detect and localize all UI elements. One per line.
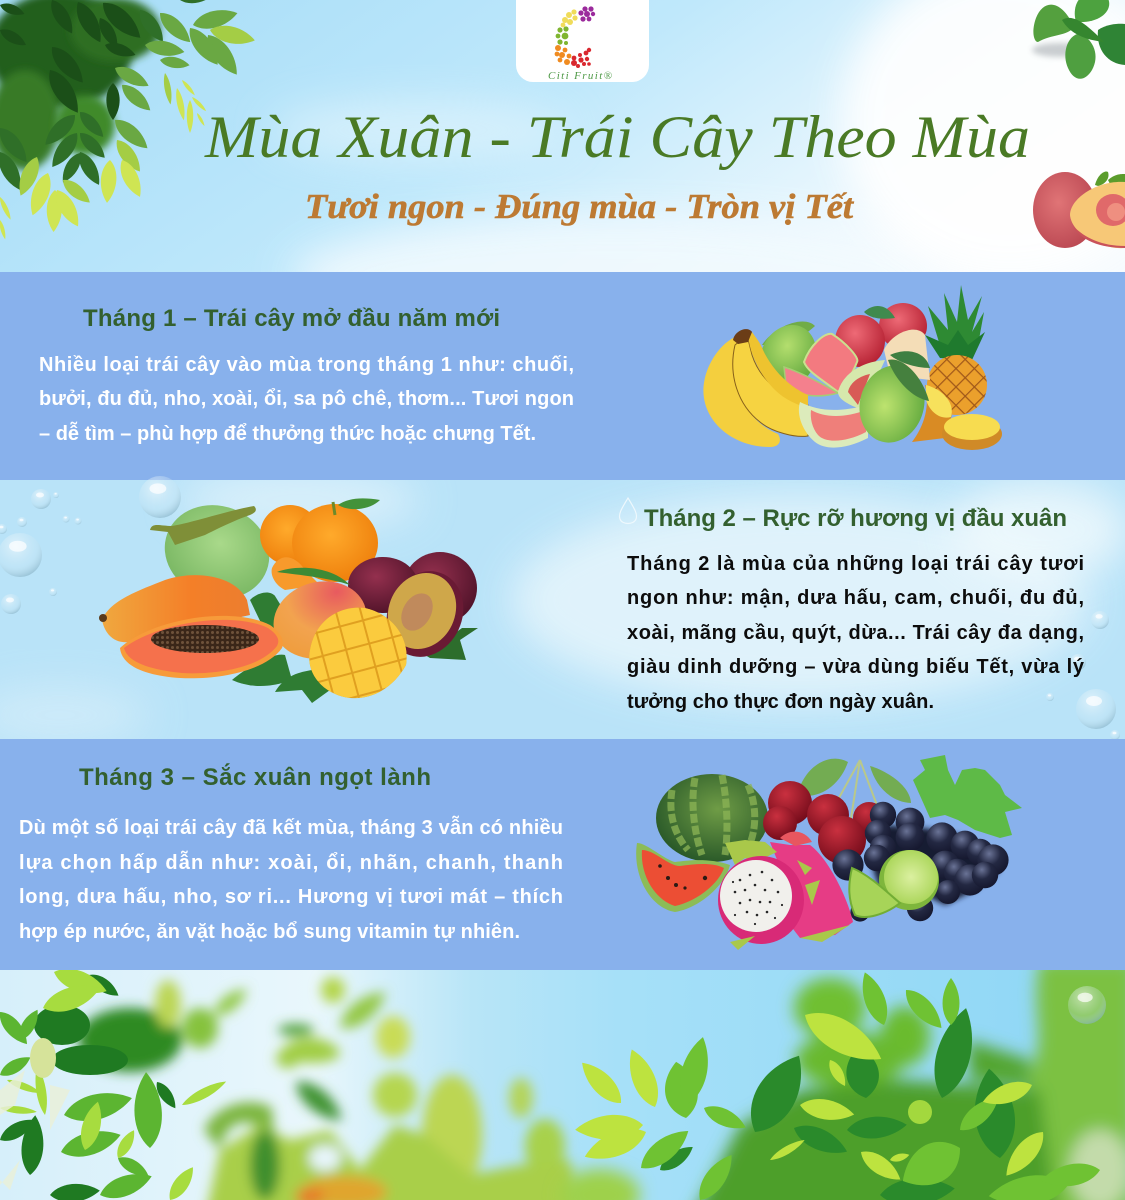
- heading: month 1: Tháng 1 – Trái cây mở đầu năm mới: [83, 305, 500, 332]
- text block: month 1: – dễ tìm – phù hợp để thưởng thức hoặc chưng Tết.: [39, 421, 536, 445]
- subtitle: Tươi ngon - Đúng mùa - Tròn vị Tết: [305, 187, 854, 226]
- apples: [835, 303, 930, 380]
- icon: peach: [1033, 172, 1125, 248]
- text block: month 3: lựa chọn hấp dẫn như: xoài, ổi, nhãn, chanh, thanh: [19, 850, 563, 874]
- water bubble on foliage: [1068, 986, 1106, 1024]
- text block: month 1: bưởi, đu đủ, nho, xoài, ổi, sa pô chê, thơm... Tươi ngon: [39, 388, 574, 410]
- illustration: month 3 fruit: [636, 755, 1022, 950]
- bottom foliage scene: [0, 960, 1125, 1200]
- pineapple: [912, 285, 1002, 450]
- text block: month 2: ngon như: mận, dưa hấu, cam, chuối, đu đủ,: [627, 587, 1084, 609]
- plums: [348, 552, 478, 670]
- guava: [750, 316, 857, 398]
- text block: month 3: long, dưa hấu, nho, sơ ri... Hương vị tươi mát – thích: [19, 886, 563, 908]
- text block: month 2: tưởng cho thực đơn ngày xuân.: [627, 691, 934, 713]
- heading: month 3: Tháng 3 – Sắc xuân ngọt lành: [79, 763, 431, 791]
- icon: faint drop beside month 2 heading: [619, 498, 637, 524]
- illustration: month 1 fruit: [703, 285, 1002, 450]
- blurred background leaves: right: [560, 960, 1125, 1200]
- foreground leaves right: [656, 1004, 1020, 1200]
- heading: month 2: Tháng 2 – Rực rỡ hương vị đầu xuân: [644, 505, 1067, 532]
- cherries: [763, 759, 911, 864]
- text block: month 2: xoài, mãng cầu, quýt, dừa... Trái cây đa dạng,: [627, 622, 1084, 644]
- foreground leaves left: [0, 970, 180, 1200]
- limes: [849, 850, 939, 917]
- section background: month 2 sky: [0, 470, 1125, 745]
- icon: basil leaves: [1032, 0, 1125, 79]
- top-left foliage: [0, 0, 257, 240]
- header background sky: [0, 0, 1125, 272]
- panel: month 1: [0, 272, 1125, 480]
- dragon fruit: [718, 832, 853, 950]
- coconut: [150, 491, 283, 613]
- mango: [265, 568, 375, 669]
- panel: month 3: [0, 739, 1125, 970]
- pomelo: [799, 351, 933, 450]
- papaya whole: [99, 575, 250, 642]
- water bubbles: [0, 476, 1120, 740]
- green leaves: [232, 593, 330, 703]
- text block: month 1: [39, 354, 574, 445]
- text block: month 2: Tháng 2 là mùa của những loại trái cây tươi: [627, 553, 1084, 575]
- oranges: [260, 498, 380, 590]
- blurred background leaves: centre: [78, 977, 590, 1200]
- illustration: month 2 fruit: [99, 498, 478, 703]
- bananas: [703, 329, 808, 447]
- watermelon: [636, 774, 768, 912]
- text block: month 2: giàu dinh dưỡng – vừa dùng biếu Tết, vừa lý: [627, 656, 1085, 678]
- text block: month 1: Nhiều loại trái cây vào mùa trong tháng 1 như: chuối,: [39, 354, 574, 376]
- text block: month 3: [19, 815, 563, 943]
- text block: month 3: Dù một số loại trái cây đã kết mùa, tháng 3 vẫn có nhiều: [19, 815, 563, 839]
- text block: month 2: [627, 553, 1085, 713]
- cubed mango: [309, 608, 407, 698]
- papaya half: [120, 616, 283, 678]
- text block: month 3: hợp ép nước, ăn vặt hoặc bổ sung vitamin tự nhiên.: [19, 921, 520, 943]
- title: Mùa Xuân - Trái Cây Theo Mùa: [204, 104, 1030, 170]
- logo: Citi Fruit: Citi Fruit®: [548, 70, 613, 82]
- logo: Citi Fruit: [516, 0, 649, 82]
- grapes: [832, 755, 1022, 922]
